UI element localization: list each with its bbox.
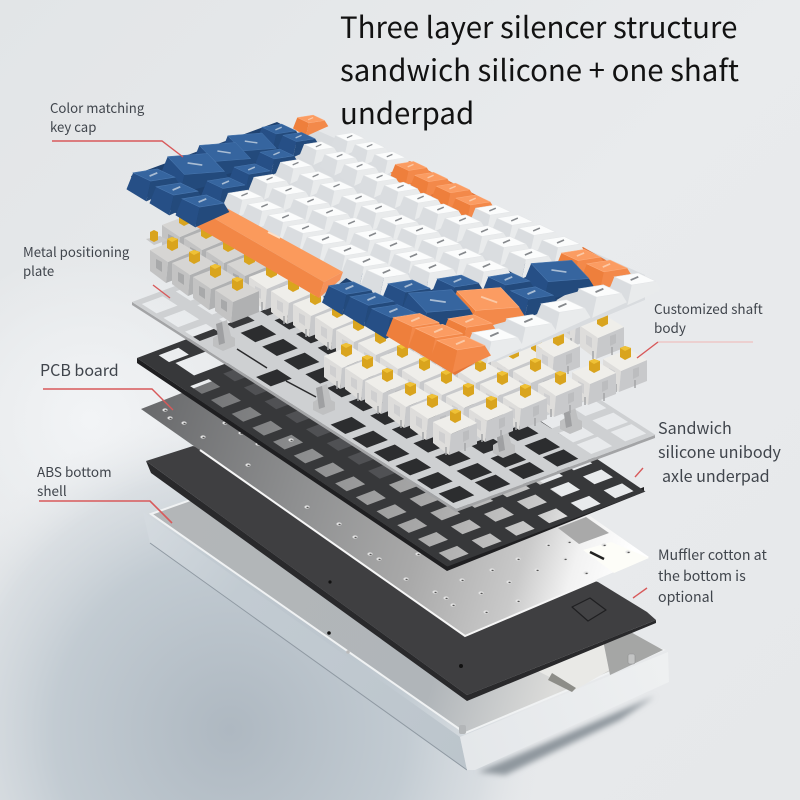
label: color matching key cap: key cap [50,117,96,136]
base: left blue block [131,122,305,225]
left stem on plate corner [146,230,168,245]
key row 2 [194,142,557,349]
title: underpad [340,91,474,133]
label: customized shaft body: Customized shaft [654,298,763,318]
key row 0 [126,169,491,373]
metal positioning plate [132,228,656,509]
keyboard base under caps [200,125,645,362]
label: metal positioning plate: Metal positioning [23,242,130,261]
label: ABS bottom shell: ABS bottom [37,461,112,481]
plate hole underlay [199,293,590,507]
shell inner floor [151,498,663,733]
label: muffler cotton: the bottom is [658,566,746,586]
shell left side wall [143,512,467,770]
title: sandwich silicone + one shaft [340,48,739,90]
label: customized shaft body [654,298,763,337]
label: customized shaft body: body [654,317,686,337]
key row 4 [256,124,627,318]
panel: key caps [126,115,661,375]
label: ABS bottom shell [37,461,112,500]
label: sandwich silicone [658,415,782,487]
leader line: silicone [635,468,643,477]
base: right blue block [485,262,590,310]
title [340,5,739,133]
underpad shadow patch [208,348,443,486]
silicone underpad edge [137,358,644,571]
base: right orange pair [563,247,625,286]
label: ABS bottom shell: shell [37,480,67,500]
key row 3 [222,133,591,334]
plate slit [237,349,316,397]
label: sandwich silicone: silicone unibody [658,439,782,463]
spacebar [197,205,343,298]
label: metal positioning plate: plate [23,261,54,280]
metal positioning plate edge [132,302,655,512]
sheet recess outline [572,598,606,621]
panel: customized switches [150,212,647,455]
panel: PCB board [141,335,649,636]
base: top orange strip [387,161,488,217]
key row 5 [293,115,661,305]
label: muffler cotton: optional [658,587,714,607]
panel: muffler cotton sheet [146,446,656,701]
stabilizer clips [213,320,582,458]
label: PCB board: PCB board [40,357,119,381]
shell front side wall [460,652,669,770]
PCB solder points [162,408,631,614]
label: metal positioning plate [23,242,130,280]
leader line: key cap [52,141,183,157]
screw post [628,654,635,664]
title: Three layer silencer structure [340,5,737,47]
label: muffler cotton: Muffler cotton at [658,545,767,565]
leader line: metal plate [153,285,170,298]
leader line: PCB board [43,389,173,410]
label: sandwich silicone: Sandwich [658,415,732,439]
ground shadow [478,696,655,775]
label: color matching key cap [50,98,145,136]
inner foam blocks [530,640,627,690]
leader line: muffler [633,588,647,598]
label: sandwich silicone: axle underpad [662,463,770,487]
label: muffler cotton [658,545,767,607]
leader line: switch [637,342,658,358]
base: front blue block [323,268,462,333]
silicone underpad top with key cut-outs [137,283,646,566]
corner post [459,725,466,734]
label: color matching key cap: Color matching [50,98,145,117]
leader line: ABS shell [39,501,172,523]
base: front orange block [385,315,480,375]
leader line: switch horizontal [658,341,753,343]
PCB right chip areas [558,517,609,544]
key row 1 [161,154,524,364]
panel: ABS bottom shell [143,498,669,775]
